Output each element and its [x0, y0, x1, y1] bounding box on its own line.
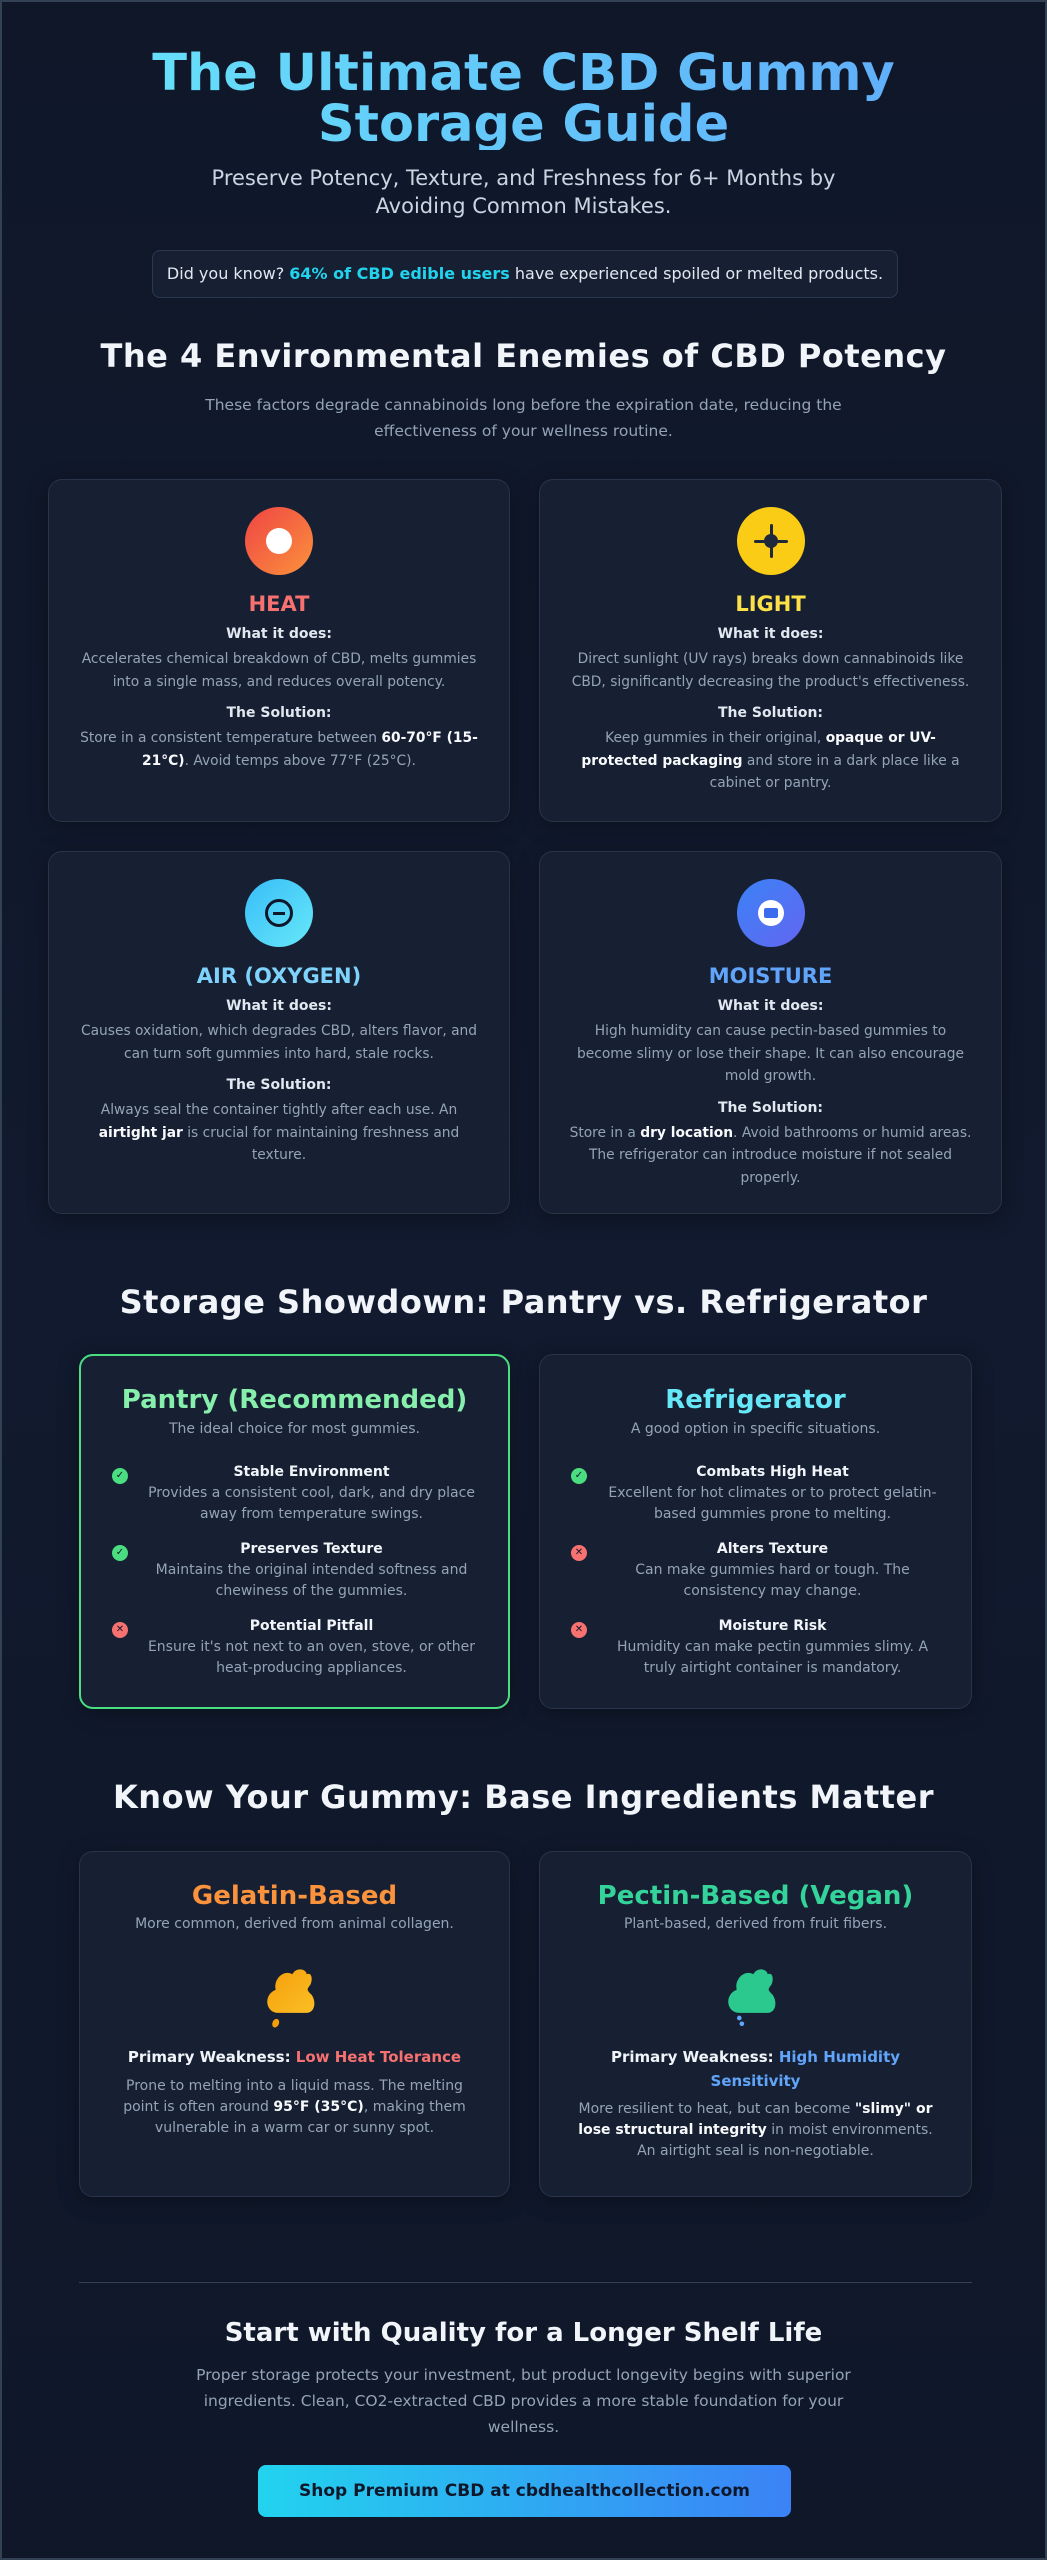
text: pectin weakness: Primary Weakness: High Humidity Sensitivity — [611, 2048, 900, 2090]
item: stable environment: Stable Environment — [233, 1464, 390, 1480]
item: moisture risk — [571, 1618, 928, 1676]
panel: light: What it does: — [718, 626, 823, 642]
icon: gelatin gummy — [267, 1969, 314, 2028]
heading: pectin: Pectin-Based (Vegan) — [598, 1881, 913, 1911]
panel: pantry — [79, 1354, 510, 1709]
subtitle — [212, 166, 835, 218]
panel: gelatin: More common, derived from animal collagen. — [135, 1916, 454, 1932]
heading: light: LIGHT — [735, 592, 806, 616]
icon: heat — [245, 507, 313, 575]
panel: gelatin: Prone to melting into a liquid mass. The melting point is often around 95°F (35°C), making them vulnerable in a warm car or sunny spot. — [123, 2078, 466, 2136]
panel: moisture: The Solution: — [718, 1100, 823, 1116]
item: stable environment: Provides a consistent cool, dark, and dry place away from temperature swings. — [148, 1485, 475, 1522]
title — [2, 48, 1045, 150]
panel: light: Direct sunlight (UV rays) breaks down cannabinoids like CBD, significantly decreasing the product's effectiveness. — [572, 651, 969, 690]
panel: pectin: More resilient to heat, but can become "slimy" or lose structural integrity in moist environments. An airtight seal is non-negotiable. — [578, 2101, 933, 2159]
text: enemies intro: These factors degrade cannabinoids long before the expiration date, reducing the effectiveness of your wellness routine. — [205, 396, 842, 440]
panel: air — [48, 851, 510, 1214]
icon: moisture — [736, 879, 804, 947]
heading: moisture: MOISTURE — [709, 964, 832, 988]
subtitle: Preserve Potency, Texture, and Freshness for 6+ Months by — [212, 166, 835, 190]
panel: pectin — [539, 1851, 972, 2197]
panel: light — [539, 479, 1002, 822]
item: preserves texture — [112, 1541, 467, 1599]
title: The Ultimate CBD Gummy — [152, 44, 895, 103]
panel: air: What it does: — [226, 998, 332, 1014]
heading: air: AIR (OXYGEN) — [197, 964, 361, 988]
callout: did you know — [152, 250, 898, 298]
item: combats high heat: Combats High Heat — [696, 1464, 849, 1480]
panel: pantry: The ideal choice for most gummies. — [169, 1421, 420, 1437]
button: shop — [258, 2465, 791, 2517]
panel: heat: Accelerates chemical breakdown of CBD, melts gummies into a single mass, and reduces overall potency. — [82, 651, 476, 690]
text: cta paragraph: Proper storage protects your investment, but product longevity begins with superior ingredients. Clean, CO2-extracted CBD provides a more stable foundation for your wellness. — [196, 2366, 851, 2436]
item: preserves texture: ✓ — [116, 1547, 124, 1558]
panel: heat — [48, 479, 510, 822]
item: moisture risk: ✕ — [575, 1624, 583, 1635]
panel: light: Keep gummies in their original, opaque or UV-protected packaging and store in a dark place like a cabinet or pantry. — [581, 730, 960, 791]
item: combats high heat — [571, 1464, 937, 1522]
heading: environmental enemies: The 4 Environmental Enemies of CBD Potency — [101, 337, 946, 375]
item: preserves texture: Maintains the original intended softness and chewiness of the gummies. — [156, 1562, 467, 1599]
item: combats high heat: Excellent for hot climates or to protect gelatin-based gummies prone to melting. — [608, 1485, 937, 1522]
icon: sun — [736, 507, 804, 575]
heading: storage showdown: Storage Showdown: Pantry vs. Refrigerator — [120, 1283, 927, 1321]
panel: heat: Store in a consistent temperature between 60-70°F (15-21°C). Avoid temps above 77°F (25°C). — [80, 730, 478, 768]
item: alters texture: Can make gummies hard or tough. The consistency may change. — [635, 1562, 910, 1599]
callout: did you know: Did you know? 64% of CBD edible users have experienced spoiled or melted products. — [167, 264, 883, 283]
panel: refrigerator — [539, 1354, 972, 1709]
button: shop: Shop Premium CBD at cbdhealthcollection.com — [299, 2481, 750, 2501]
item: preserves texture: Preserves Texture — [240, 1541, 383, 1557]
item: alters texture — [571, 1541, 910, 1599]
icon: pectin gummy — [728, 1969, 776, 2026]
item: potential pitfall — [112, 1618, 475, 1676]
heading: cta: Start with Quality for a Longer Shelf Life — [225, 2318, 822, 2348]
title: Storage Guide — [318, 95, 729, 154]
item: moisture risk: Humidity can make pectin gummies slimy. A truly airtight container is mandatory. — [617, 1639, 928, 1676]
item: stable environment — [112, 1464, 475, 1522]
panel: moisture — [539, 851, 1002, 1214]
item: alters texture: ✕ — [575, 1547, 583, 1558]
panel: light: The Solution: — [718, 705, 823, 721]
panel: air: Causes oxidation, which degrades CBD, alters flavor, and can turn soft gummies into hard, stale rocks. — [81, 1023, 477, 1062]
heading: know your gummy: Know Your Gummy: Base Ingredients Matter — [113, 1778, 934, 1816]
item: alters texture: Alters Texture — [717, 1541, 828, 1557]
heading: gelatin: Gelatin-Based — [192, 1881, 397, 1911]
item: moisture risk: Moisture Risk — [719, 1618, 826, 1634]
item: potential pitfall: ✕ — [116, 1624, 124, 1635]
panel: moisture: What it does: — [718, 998, 823, 1014]
panel: pectin: Plant-based, derived from fruit fibers. — [624, 1916, 887, 1932]
panel: gelatin — [79, 1851, 510, 2197]
icon: air — [245, 879, 313, 947]
heading: heat: HEAT — [249, 592, 309, 616]
panel: air: Always seal the container tightly after each use. An airtight jar is crucial for maintaining freshness and texture. — [99, 1102, 459, 1163]
heading: refrigerator: Refrigerator — [665, 1385, 846, 1415]
subtitle: Avoiding Common Mistakes. — [376, 194, 671, 218]
panel: air: The Solution: — [226, 1077, 332, 1093]
item: potential pitfall: Ensure it's not next to an oven, stove, or other heat-producing appliances. — [148, 1639, 475, 1676]
panel: heat: What it does: — [226, 626, 332, 642]
panel: refrigerator: A good option in specific situations. — [631, 1421, 880, 1437]
panel: moisture: High humidity can cause pectin-based gummies to become slimy or lose their shape. It can also encourage mold growth. — [577, 1023, 964, 1084]
item: stable environment: ✓ — [116, 1470, 124, 1481]
panel: moisture: Store in a dry location. Avoid bathrooms or humid areas. The refrigerator can introduce moisture if not sealed properly. — [570, 1124, 971, 1186]
panel: heat: The Solution: — [226, 705, 332, 721]
item: potential pitfall: Potential Pitfall — [250, 1618, 373, 1634]
heading: pantry: Pantry (Recommended) — [122, 1385, 467, 1415]
item: combats high heat: ✓ — [575, 1470, 583, 1481]
text: gelatin weakness: Primary Weakness: Low Heat Tolerance — [128, 2048, 461, 2066]
